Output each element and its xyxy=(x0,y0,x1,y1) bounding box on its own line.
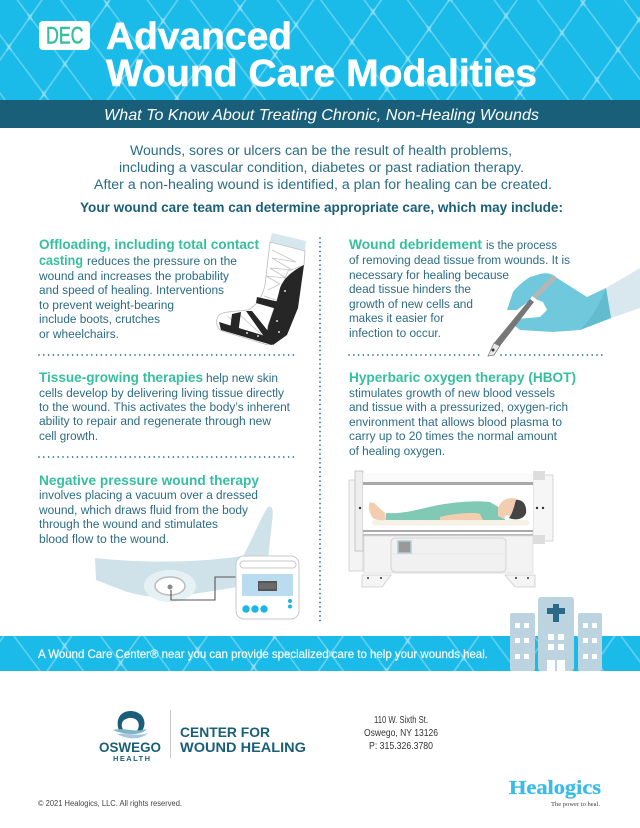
text block: offloading: Offloading, including total contact xyxy=(39,236,259,252)
text block: negative pressure wound therapy: blood flow to the wound. xyxy=(39,532,169,546)
logo: Healogics xyxy=(509,777,601,808)
text block: hyperbaric oxygen therapy: carry up to 20 times the normal amount xyxy=(349,429,558,443)
text block: wound debridement: infection to occur. xyxy=(349,326,441,340)
divider dots right 1 xyxy=(349,354,604,356)
text block: negative pressure wound therapy: wound, which draws fluid from the body xyxy=(38,503,249,517)
intro paragraph: Wounds, sores or ulcers can be the result of health problems, xyxy=(130,143,512,159)
title: Advanced xyxy=(106,16,292,58)
logo: Oswego Health xyxy=(99,711,161,763)
text block: tissue-growing therapies: Tissue-growing therapies xyxy=(39,369,203,385)
text block: tissue-growing therapies: cell growth. xyxy=(39,429,98,443)
text block: offloading xyxy=(38,236,259,341)
title xyxy=(106,16,537,95)
logo text: Center for Wound Healing xyxy=(180,724,306,755)
text block: hyperbaric oxygen therapy: stimulates growth of new blood vessels xyxy=(349,386,555,400)
subtitle bar xyxy=(0,100,640,128)
text block: offloading: to prevent weight-bearing xyxy=(39,298,174,312)
callout banner: A Wound Care Center® near you can provide specialized care to help your wounds heal. xyxy=(38,647,488,661)
header band xyxy=(0,0,640,100)
text block: negative pressure wound therapy: through the wound and stimulates xyxy=(39,517,218,531)
text block: offloading: casting xyxy=(39,252,83,268)
logo text: Center for Wound Healing: WOUND HEALING xyxy=(180,739,306,755)
text block: wound debridement: growth of new cells and xyxy=(349,297,473,311)
icon: hospital xyxy=(510,597,602,671)
text block: negative pressure wound therapy: involves placing a vacuum over a dressed xyxy=(39,488,258,502)
text block: wound debridement: of removing dead tissue from wounds. It is xyxy=(349,253,570,267)
copyright: © 2021 Healogics, LLC. All rights reserved. xyxy=(38,799,182,808)
text block: hyperbaric oxygen therapy xyxy=(349,369,576,458)
text block: hyperbaric oxygen therapy: of healing oxygen. xyxy=(349,444,445,458)
address: Oswego, NY 13126 xyxy=(364,727,438,739)
subtitle bar: What To Know About Treating Chronic, Non-Healing Wounds xyxy=(104,107,539,124)
logo text: Center for Wound Healing: CENTER FOR xyxy=(180,724,270,740)
text block: tissue-growing therapies: ability to repair and regenerate through new xyxy=(39,414,271,428)
address: P: 315.326.3780 xyxy=(369,740,433,752)
text block: hyperbaric oxygen therapy: environment that allows blood plasma to xyxy=(349,415,562,429)
intro paragraph xyxy=(94,143,552,193)
divider dots left 2 xyxy=(39,456,294,458)
divider dots left 1 xyxy=(39,354,294,356)
text block: wound debridement: dead tissue hinders the xyxy=(349,282,471,296)
vertical dotted divider xyxy=(319,238,321,622)
logo divider xyxy=(170,710,171,758)
text block: tissue-growing therapies: to the wound. This activates the body’s inherent xyxy=(39,400,291,414)
text block: wound debridement xyxy=(349,236,570,340)
title: Wound Care Modalities xyxy=(106,53,537,95)
icon: walking boot on casted leg xyxy=(217,233,306,345)
text block: hyperbaric oxygen therapy: and tissue with a pressurized, oxygen-rich xyxy=(349,400,568,414)
text block: tissue-growing therapies: help new skin xyxy=(206,371,278,385)
text block: wound debridement: necessary for healing because xyxy=(349,268,509,282)
month badge: DEC: DEC xyxy=(46,22,84,50)
address xyxy=(364,714,438,752)
logo: Oswego Health: HEALTH xyxy=(113,754,150,763)
text block: negative pressure wound therapy xyxy=(38,472,259,546)
text block: hyperbaric oxygen therapy: Hyperbaric oxygen therapy (HBOT) xyxy=(349,369,576,385)
text block: offloading: wound and increases the probability xyxy=(38,269,230,283)
text block: wound debridement: makes it easier for xyxy=(349,311,444,325)
text block: tissue-growing therapies xyxy=(39,369,291,443)
illustration: hyperbaric chamber with patient xyxy=(349,471,553,587)
text block: wound debridement: is the process xyxy=(486,238,557,252)
text block: offloading: and speed of healing. Interventions xyxy=(39,283,224,297)
text block: wound debridement: Wound debridement xyxy=(349,236,482,252)
address: 110 W. Sixth St. xyxy=(374,714,428,726)
illustration: gloved hand holding scalpel xyxy=(488,268,640,356)
callout banner xyxy=(0,636,640,671)
logo: Healogics: Healogics xyxy=(509,777,601,799)
intro paragraph: After a non-healing wound is identified, a plan for healing can be created. xyxy=(94,177,552,193)
text block: tissue-growing therapies: cells develop by delivering living tissue directly xyxy=(39,386,285,400)
illustration: arm with vacuum therapy device xyxy=(95,507,299,619)
text block: offloading: reduces the pressure on the xyxy=(87,254,237,268)
text block: negative pressure wound therapy: Negative pressure wound therapy xyxy=(39,472,259,488)
text block: offloading: or wheelchairs. xyxy=(39,327,119,341)
logo: Oswego Health: OSWEGO xyxy=(99,740,161,755)
care team lead-in: Your wound care team can determine appropriate care, which may include: xyxy=(80,199,563,215)
intro paragraph: including a vascular condition, diabetes or past radiation therapy. xyxy=(119,160,524,176)
logo: Healogics: The power to heal. xyxy=(551,801,600,808)
text block: offloading: include boots, crutches xyxy=(39,312,160,326)
